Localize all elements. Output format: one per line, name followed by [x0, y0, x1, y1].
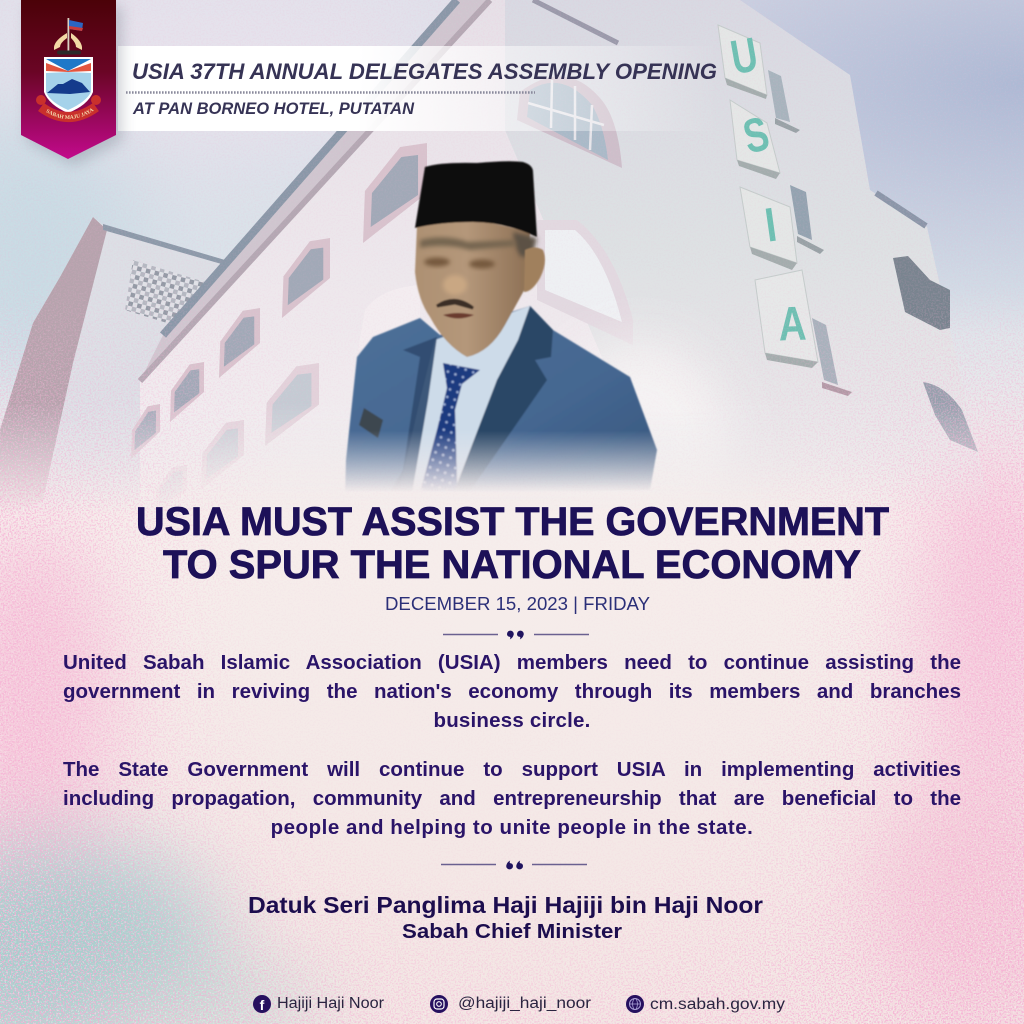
- tie: [422, 362, 480, 490]
- lower arched window: [537, 220, 633, 345]
- main title: TO SPUR THE NATIONAL ECONOMY: [163, 543, 861, 587]
- paragraph 1: United Sabah Islamic Association (USIA) members need to continue assisting the: [63, 651, 961, 674]
- footer: website: cm.sabah.gov.my: [650, 996, 785, 1013]
- footer: Instagram: [430, 995, 591, 1013]
- USIA sign: S: [738, 106, 774, 164]
- footer: Facebook: f: [260, 997, 265, 1013]
- icon: Sabah crest: [36, 18, 101, 122]
- main title: USIA MUST ASSIST THE GOVERNMENT: [136, 500, 889, 544]
- header venue: AT PAN BORNEO HOTEL, PUTATAN: [132, 99, 415, 118]
- paragraph 2: including propagation, community and entrepreneurship that are beneficial to the: [63, 787, 961, 810]
- face: [415, 218, 530, 357]
- paragraph 1: government in reviving the nation's economy through its members and branches: [63, 680, 961, 703]
- paragraph 1: business circle.: [433, 709, 591, 732]
- right facade: [426, 0, 964, 446]
- suit: [345, 306, 657, 500]
- lapels: [456, 306, 554, 489]
- upper arched window: [517, 76, 622, 168]
- brow shadow: [420, 237, 515, 250]
- main left facade: [140, 0, 680, 540]
- fade near portrait: [601, 335, 718, 446]
- hair: [513, 232, 537, 258]
- USIA sign: A: [778, 298, 807, 352]
- date: DECEMBER 15, 2023 | FRIDAY: [385, 594, 650, 614]
- paragraph 1: [63, 651, 961, 732]
- portrait: Datuk Seri Hajiji: [345, 161, 657, 510]
- header white strip: [118, 46, 718, 131]
- roof cornice bands: [140, 0, 490, 381]
- songkok hat: [415, 161, 537, 237]
- name badge: [359, 408, 383, 438]
- USIA sign: U: [727, 27, 762, 84]
- icon: Sabah crest: SABAH MAJU JAYA: [46, 108, 94, 119]
- wall vent grid: [125, 260, 205, 327]
- left wing: [50, 219, 154, 473]
- USIA sign: [718, 25, 818, 368]
- main title: [136, 500, 889, 587]
- speaker name: Datuk Seri Panglima Haji Hajiji bin Haji Noor: [248, 892, 763, 918]
- arched windows: [363, 143, 427, 243]
- header heading: USIA 37TH ANNUAL DELEGATES ASSEMBLY OPENING: [132, 59, 717, 84]
- footer: Facebook: Hajiji Haji Noor: [277, 995, 384, 1012]
- small right windows: [768, 70, 790, 122]
- paragraph 2: people and helping to unite people in the state.: [271, 816, 753, 839]
- ear: [524, 248, 545, 292]
- banner with state crest: [21, 0, 128, 168]
- shirt: [410, 306, 531, 488]
- building: [0, 0, 978, 502]
- paragraph 2: The State Government will continue to support USIA in implementing activities: [63, 758, 961, 781]
- USIA sign: I: [762, 199, 780, 253]
- dotted divider: [126, 91, 535, 94]
- speaker title: Sabah Chief Minister: [402, 921, 622, 943]
- paragraph 2: [63, 758, 961, 839]
- footer: Instagram: @hajiji_haji_noor: [458, 995, 591, 1012]
- opening quote divider: [443, 631, 589, 640]
- closing quote divider: [441, 860, 587, 869]
